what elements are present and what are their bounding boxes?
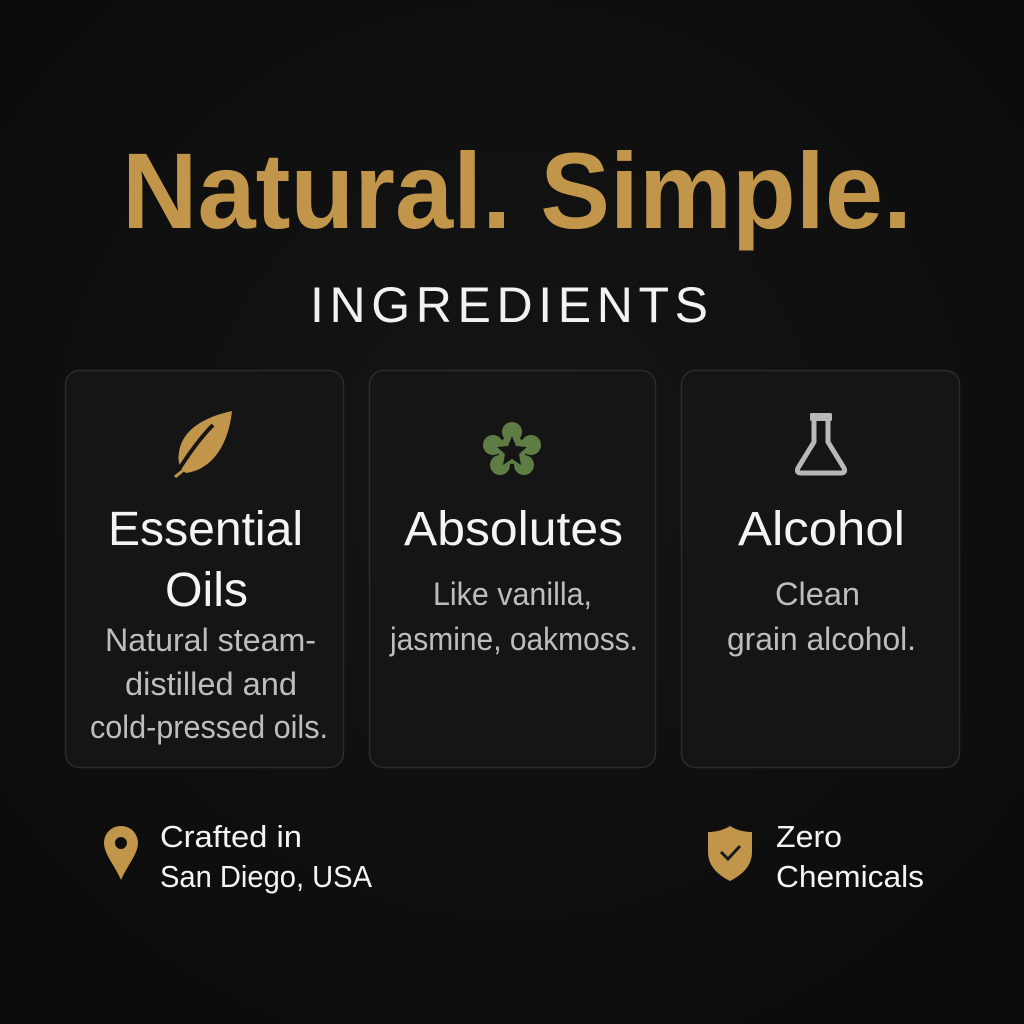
description: Like vanilla, — [433, 576, 592, 612]
description — [90, 622, 328, 745]
icon: flower — [483, 422, 541, 475]
panel: essential oils: Oils — [165, 564, 248, 617]
description: grain alcohol. — [727, 621, 916, 657]
icon: leaf — [175, 411, 232, 477]
badge: crafted in san diego — [104, 819, 372, 894]
badge: crafted in san diego: Crafted in — [160, 819, 302, 854]
description: cold-pressed oils. — [90, 709, 328, 745]
panel: alcohol — [682, 370, 960, 768]
icon: flask — [797, 413, 845, 473]
icon: location pin — [104, 826, 138, 880]
badge: zero chemicals — [708, 819, 924, 894]
description: Natural steam- — [105, 622, 316, 658]
title: Natural. Simple. — [122, 130, 912, 251]
heading: Absolutes — [404, 503, 623, 556]
subtitle: INGREDIENTS — [310, 277, 708, 333]
badge: zero chemicals: Zero — [776, 819, 842, 854]
panel: essential oils — [66, 370, 344, 768]
badge: crafted in san diego: San Diego, USA — [160, 859, 372, 894]
badge: zero chemicals: Chemicals — [776, 859, 924, 894]
panel: absolutes — [370, 370, 656, 768]
description: distilled and — [125, 666, 297, 702]
heading: Essential — [108, 503, 303, 556]
description: Clean — [775, 576, 860, 612]
description: jasmine, oakmoss. — [389, 621, 638, 657]
description — [389, 576, 638, 657]
description — [727, 576, 916, 657]
heading: Alcohol — [738, 503, 905, 556]
icon: shield — [708, 826, 752, 881]
